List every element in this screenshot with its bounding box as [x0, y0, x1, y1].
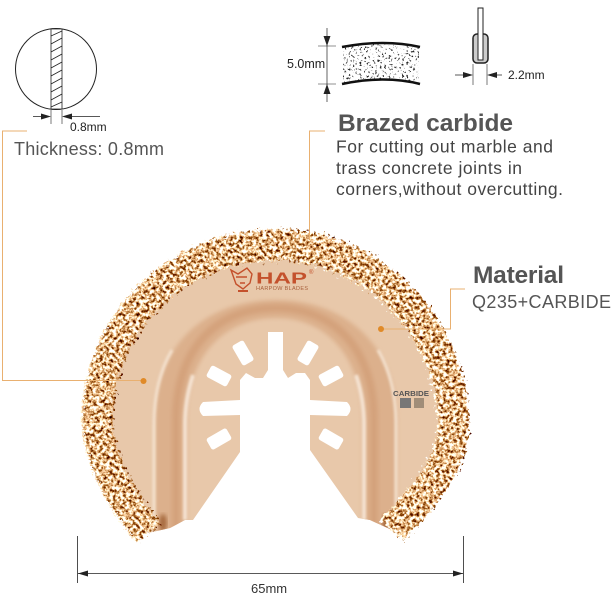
mount slots: [206, 340, 344, 450]
diagram: thickness circle: [16, 28, 107, 134]
diagram: thickness circle: 0.8mm: [70, 120, 107, 134]
callout: material: Material: [473, 262, 564, 289]
blade body: [97, 245, 453, 533]
callout: thickness: [2, 131, 164, 384]
callout: brazed carbide: Brazed carbide: [338, 110, 513, 137]
diagram: 2.2mm section: [455, 8, 545, 85]
diagram: 5.0mm section: [287, 28, 420, 102]
callout: material: Q235+CARBIDE: [472, 292, 611, 312]
callout: material: [378, 262, 611, 332]
dimension: 65mm: [78, 536, 464, 596]
dimension: 65mm: 65mm: [251, 581, 287, 596]
callout: brazed carbide: For cutting out marble and: [336, 136, 553, 156]
dimension arrows: [33, 116, 100, 118]
callout: brazed carbide: corners,without overcutting.: [336, 179, 563, 199]
raised U ridge: [154, 300, 397, 535]
callout: brazed carbide: [310, 110, 563, 240]
logo: HAP Harpow Blades: ®: [309, 269, 314, 276]
logo: HAP Harpow Blades: HARPOW BLADES: [256, 286, 308, 292]
hatched blade section: [51, 29, 62, 124]
grit section: [343, 44, 419, 83]
logo: HAP Harpow Blades: HAP: [256, 270, 307, 288]
blade: [97, 245, 453, 535]
carbide grit edge: [97, 245, 453, 533]
logo: HAP Harpow Blades: [231, 268, 314, 292]
carbide mark: [393, 391, 429, 408]
diagram: 5.0mm section: 5.0mm: [287, 57, 325, 71]
diagram: 2.2mm section: 2.2mm: [508, 68, 545, 82]
callout: brazed carbide: trass concrete joints in: [336, 158, 522, 178]
icon: mascot head: [231, 268, 252, 291]
callout: thickness: Thickness: 0.8mm: [14, 139, 164, 159]
carbide mark: CARBIDE: [393, 391, 429, 398]
